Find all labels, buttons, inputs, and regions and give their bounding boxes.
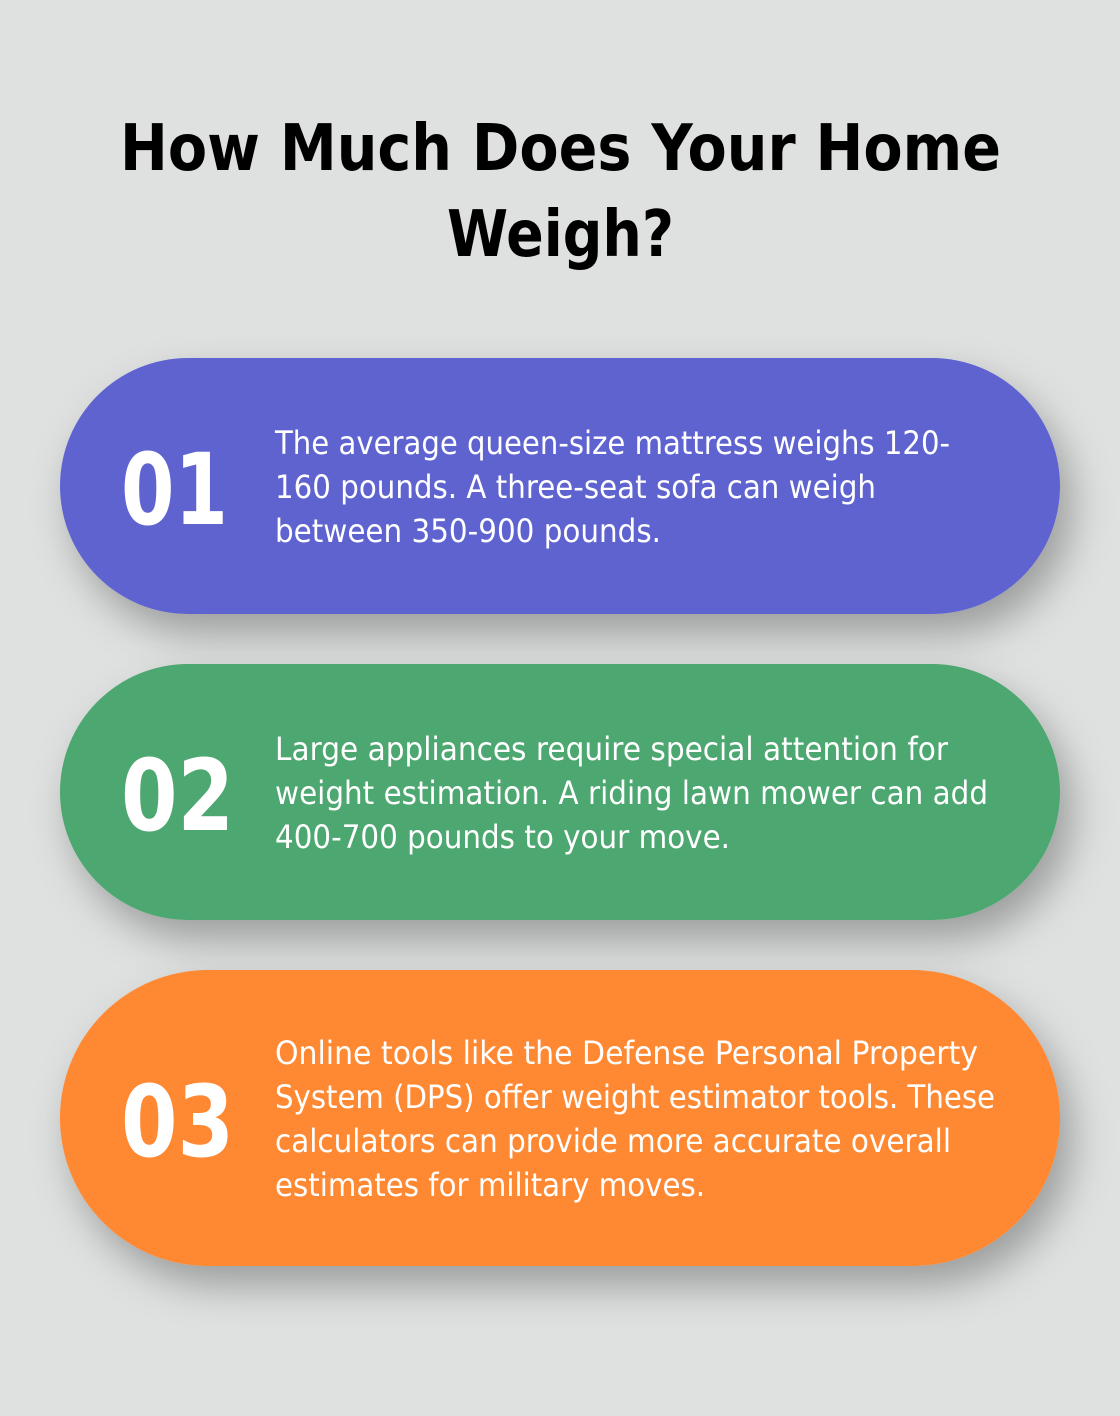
- number 03: 03: [121, 1065, 234, 1180]
- title: [120, 112, 1001, 272]
- pill background: orange: [60, 970, 1060, 1266]
- pill background: green: [60, 664, 1060, 920]
- text block: appliances and lawn mower: [275, 730, 988, 856]
- text block: appliances and lawn mower: Large appliances require special attention for: [275, 730, 949, 768]
- text block: online estimator tools: System (DPS) offer weight estimator tools. These: [275, 1078, 995, 1116]
- text block: online estimator tools: Online tools like the Defense Personal Property: [275, 1034, 978, 1072]
- text block: appliances and lawn mower: weight estimation. A riding lawn mower can add: [275, 774, 988, 812]
- number 02: 02: [121, 739, 234, 854]
- pill background: blue: [60, 358, 1060, 614]
- text block: online estimator tools: estimates for military moves.: [275, 1166, 705, 1204]
- text block: mattress and sofa weights: The average queen-size mattress weighs 120-: [274, 424, 950, 462]
- text block: online estimator tools: [275, 1034, 995, 1204]
- panel: step 03: [60, 970, 1060, 1266]
- text block: mattress and sofa weights: between 350-900 pounds.: [275, 512, 661, 550]
- title: Weigh?: [447, 198, 674, 272]
- panel: step 02: [60, 664, 1060, 920]
- title: How Much Does Your Home: [120, 112, 1001, 186]
- panel: step 01: [60, 358, 1060, 614]
- text block: appliances and lawn mower: 400-700 pounds to your move.: [275, 818, 730, 856]
- text block: mattress and sofa weights: [274, 424, 950, 550]
- text block: online estimator tools: calculators can provide more accurate overall: [275, 1122, 951, 1160]
- number 01: 01: [121, 433, 228, 548]
- text block: mattress and sofa weights: 160 pounds. A three-seat sofa can weigh: [275, 468, 876, 506]
